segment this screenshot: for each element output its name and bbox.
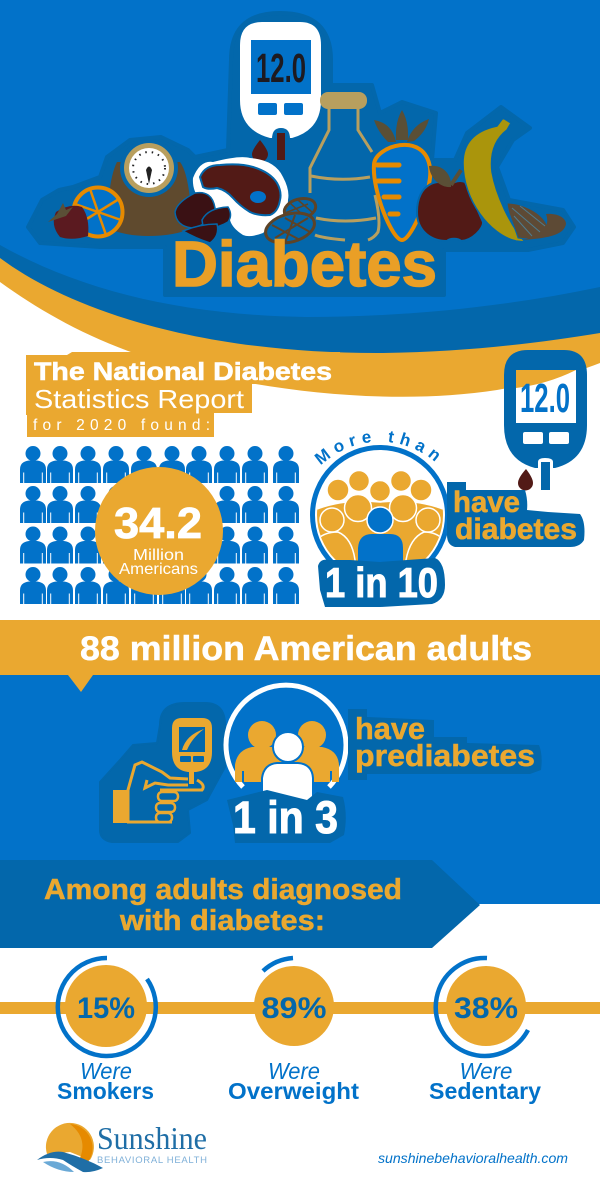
banner: 88 million American adults: 88 million American adults	[80, 630, 532, 668]
stat: 1 in 10	[310, 431, 447, 607]
stat: 15% smokers	[57, 958, 156, 1104]
icon: carrot	[374, 110, 430, 240]
stat: 38% sedentary	[429, 958, 541, 1104]
arrow banner: among adults: Among adults diagnosed	[44, 874, 402, 906]
url: sunshinebehavioralhealth.com	[378, 1150, 568, 1166]
icon: almonds	[507, 203, 566, 240]
stat: 38% sedentary: 38%	[454, 992, 518, 1025]
arrow banner: among adults	[0, 860, 480, 948]
text: have prediabetes	[348, 709, 542, 780]
callout: 34.2 million Americans: Million	[133, 547, 184, 564]
header orange swoosh	[0, 250, 600, 397]
stat: 1 in 3	[226, 685, 346, 843]
icon: strawberry	[48, 203, 88, 239]
stat: 89% overweight: Were	[268, 1058, 320, 1084]
stat: 15% smokers: Were	[80, 1058, 132, 1084]
icon: glucose meter: 12.0	[256, 45, 306, 91]
icon: weighing scale	[107, 139, 192, 236]
icon: beans	[175, 193, 230, 243]
icon: bottle	[310, 92, 380, 240]
stat: 15% smokers: Smokers	[57, 1078, 154, 1104]
icon: orange slice	[74, 188, 122, 236]
text: have diabetes	[447, 482, 584, 547]
heading: national report: Statistics Report	[34, 384, 245, 414]
stat: 89% overweight: 89%	[262, 992, 326, 1025]
illustration halo	[28, 13, 574, 295]
header illustration	[28, 13, 574, 300]
icon: banana	[463, 118, 525, 242]
stat: 89% overweight	[228, 958, 359, 1104]
icon: steak	[193, 157, 288, 236]
icon: hand testing glucose	[100, 703, 225, 842]
stat: 15% smokers: 15%	[77, 992, 135, 1025]
1 in 3 label: 1 in 3	[233, 792, 338, 843]
icon: peanuts	[262, 195, 318, 248]
stat: 38% sedentary: Sedentary	[429, 1078, 541, 1104]
title: Diabetes	[172, 228, 437, 300]
text: have diabetes: diabetes	[455, 513, 577, 546]
stat: 38% sedentary: Were	[460, 1058, 512, 1084]
1 in 10 label: 1 in 10	[325, 559, 438, 606]
heading: national report: The National Diabetes	[34, 358, 332, 386]
logo: Sunshine Behavioral Health: Sunshine	[97, 1120, 207, 1156]
callout: 34.2 million Americans: 34.2	[114, 499, 202, 548]
header blue background	[0, 0, 600, 317]
logo: Sunshine Behavioral Health: BEHAVIORAL HEALTH	[97, 1155, 207, 1166]
heading: national report	[26, 352, 340, 437]
icon: glucose meter	[240, 22, 321, 162]
section: prediabetes blue background	[0, 675, 600, 904]
text: have prediabetes: have	[355, 711, 425, 746]
more than label: More than	[314, 431, 439, 465]
timeline bar	[0, 1002, 600, 1014]
pictogram: people grid	[20, 446, 299, 604]
arrow banner: among adults: with diabetes:	[119, 905, 325, 937]
logo: Sunshine Behavioral Health	[37, 1120, 207, 1172]
icon: apple	[417, 166, 483, 241]
icon: glucose meter right: 12.0	[520, 375, 570, 421]
people circle	[310, 445, 447, 562]
heading: national report: for 2020 found:	[33, 417, 210, 434]
people icons	[235, 721, 339, 815]
callout: 34.2 million Americans	[95, 467, 223, 595]
text: have diabetes: have	[453, 486, 520, 519]
stat: 89% overweight: Overweight	[228, 1078, 359, 1104]
banner: 88 million American adults	[0, 620, 600, 692]
text: have prediabetes: prediabetes	[355, 738, 535, 773]
header dark blue swoosh	[0, 240, 600, 353]
ring	[226, 685, 346, 787]
callout: 34.2 million Americans: Americans	[119, 561, 198, 578]
heading backing	[26, 352, 340, 437]
icon: glucose meter right	[504, 350, 587, 490]
